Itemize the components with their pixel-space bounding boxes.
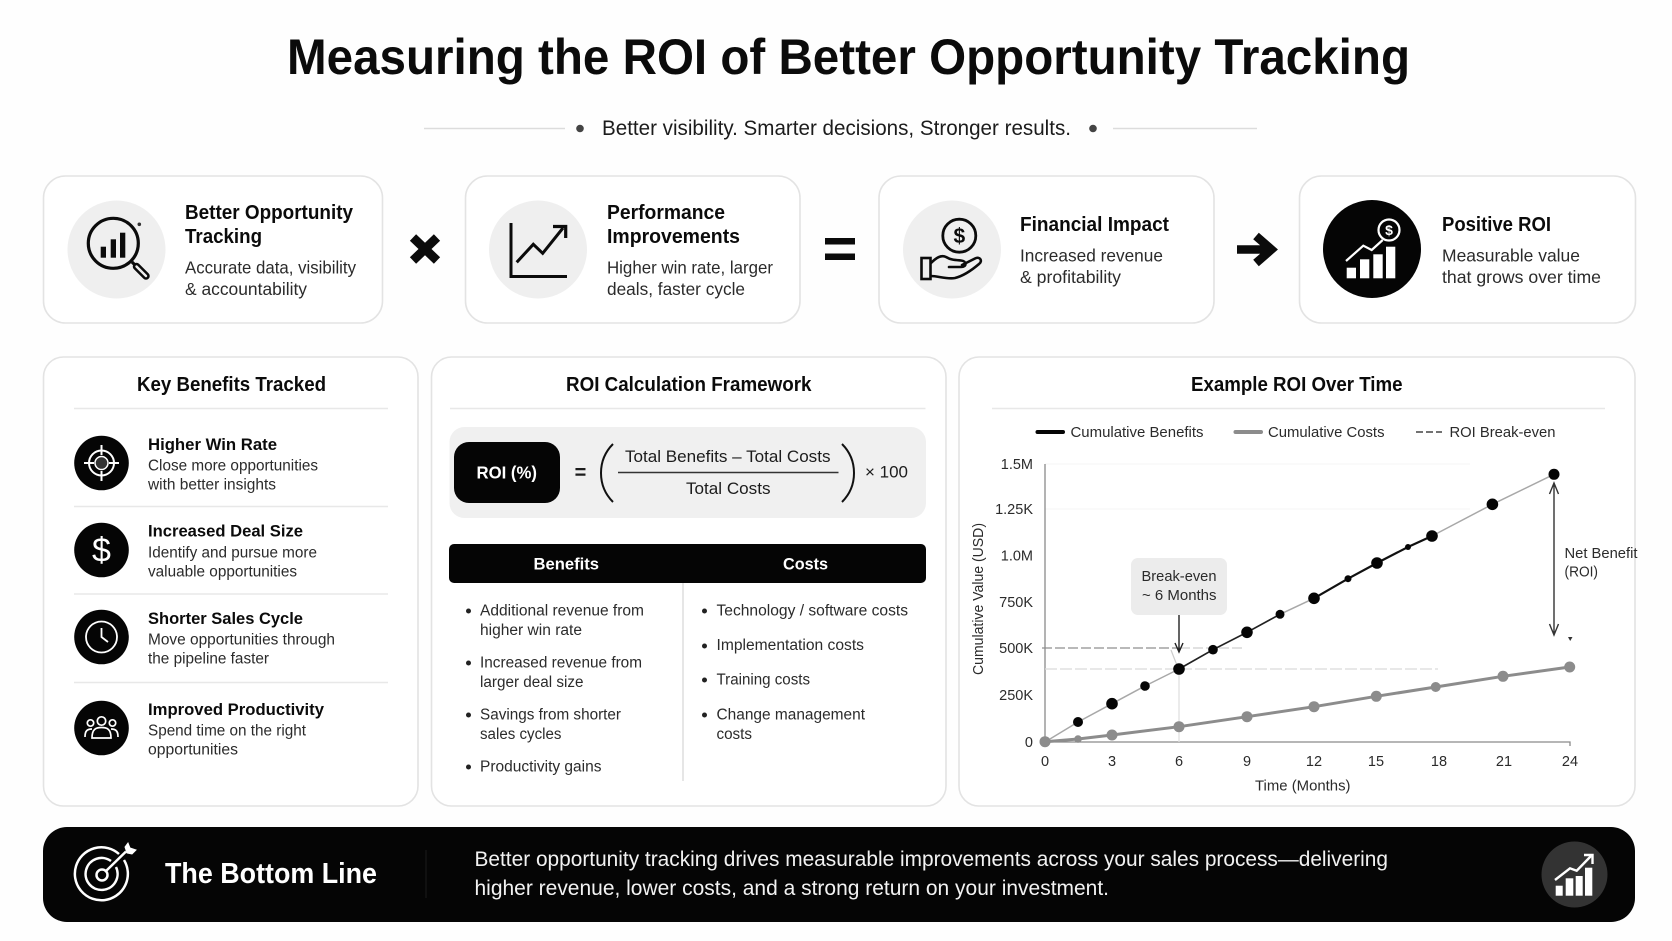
formula: Total Benefits – Total Costs <box>625 447 830 466</box>
label: net benefit <box>1564 546 1638 580</box>
x axis labels: 0 <box>1041 754 1049 770</box>
benefits list: sales cycles <box>480 726 562 743</box>
card text <box>1020 213 1169 287</box>
x axis labels: 9 <box>1243 754 1251 770</box>
x axis labels <box>1041 754 1578 770</box>
icon: dollar <box>74 523 129 577</box>
card text: deals, faster cycle <box>607 279 745 299</box>
y axis labels: 500K <box>999 641 1033 657</box>
icon: magnifier with bars <box>68 200 166 298</box>
x axis labels: 15 <box>1368 754 1384 770</box>
row: increased deal size: Increased Deal Size <box>148 522 303 540</box>
card: positive ROI <box>1300 176 1636 323</box>
callout: break-even: Break-even <box>1142 569 1216 585</box>
heading: ROI Calculation Framework <box>566 373 812 396</box>
benefits list: higher win rate <box>480 622 582 639</box>
x axis title: Time (Months) <box>1255 778 1350 794</box>
arrow: break-even pointer <box>1175 615 1183 652</box>
row: increased deal size: Identify and pursue more <box>148 544 317 562</box>
costs list: Implementation costs <box>716 637 864 654</box>
x axis labels: 6 <box>1175 754 1183 770</box>
banner text: higher revenue, lower costs, and a strong return on your investment. <box>474 876 1109 900</box>
y axis labels: 1.5M <box>1001 457 1033 473</box>
callout: break-even: ~ 6 Months <box>1142 588 1216 604</box>
banner heading: The Bottom Line <box>165 858 377 890</box>
series: cumulative costs <box>1040 662 1575 747</box>
benefits list <box>466 602 644 776</box>
arrow <box>1237 236 1272 263</box>
y axis labels: 1.25K <box>995 502 1033 518</box>
card text: Tracking <box>185 225 262 248</box>
card text: Measurable value <box>1442 246 1580 266</box>
card: performance improvements <box>466 176 800 323</box>
icon: line chart <box>489 200 587 298</box>
card text: that grows over time <box>1442 267 1601 287</box>
axes <box>1045 464 1570 746</box>
card text: Better Opportunity <box>185 201 354 224</box>
title: Measuring the ROI of Better Opportunity Tracking <box>287 29 1410 85</box>
legend: ROI Break-even <box>1450 425 1556 441</box>
table header: Costs <box>783 556 828 574</box>
icon: target with arrow <box>75 843 136 900</box>
operator: multiply <box>413 238 437 260</box>
row: improved productivity: opportunities <box>148 742 238 758</box>
row: increased deal size <box>148 522 317 580</box>
card text: Positive ROI <box>1442 213 1551 236</box>
row: higher win rate: Higher Win Rate <box>148 435 277 454</box>
card text: Financial Impact <box>1020 213 1169 236</box>
benefits list: Productivity gains <box>480 758 602 776</box>
line chart <box>971 457 1638 794</box>
card text: Increased revenue <box>1020 246 1163 266</box>
label: net benefit: (ROI) <box>1564 564 1598 580</box>
gridlines <box>1045 464 1470 509</box>
card: better opportunity tracking <box>44 176 382 323</box>
card text: & profitability <box>1020 267 1121 287</box>
label: net benefit: Net Benefit <box>1564 546 1638 562</box>
icon: target <box>74 436 129 490</box>
y axis labels: 750K <box>999 595 1033 611</box>
legend: Cumulative Benefits <box>1070 425 1204 441</box>
formula: ROI (%) <box>476 462 537 482</box>
row: shorter sales cycle: the pipeline faster <box>148 650 269 668</box>
panel: ROI calculation framework <box>432 357 946 806</box>
row: shorter sales cycle: Move opportunities through <box>148 632 335 648</box>
banner: the bottom line <box>43 827 1635 922</box>
table header <box>449 544 926 583</box>
y axis labels: 250K <box>999 688 1033 704</box>
icon: hand holding coin: $ <box>953 225 965 248</box>
y axis title: Cumulative Value (USD) <box>971 523 987 675</box>
row: shorter sales cycle: Shorter Sales Cycle <box>148 609 303 628</box>
arrow: net benefit <box>1550 483 1558 635</box>
break-even guides <box>1042 648 1438 742</box>
card: financial impact <box>879 176 1214 323</box>
costs list: costs <box>716 726 752 743</box>
subtitle: Better visibility. Smarter decisions, Stronger results. <box>602 116 1071 140</box>
legend <box>1038 425 1556 441</box>
panel: example ROI over time <box>959 357 1638 806</box>
card text <box>1442 213 1601 287</box>
icon: growth chart in black circle: $ <box>1385 222 1393 238</box>
formula <box>450 427 926 518</box>
y axis labels: 1.0M <box>1001 548 1033 564</box>
panel: key benefits tracked <box>44 357 418 806</box>
x axis labels: 18 <box>1431 754 1447 770</box>
benefits list: Increased revenue from <box>480 654 642 672</box>
x axis labels: 3 <box>1108 754 1116 770</box>
card text <box>185 201 356 299</box>
y axis labels <box>995 457 1033 751</box>
row: higher win rate: with better insights <box>147 476 276 494</box>
banner text <box>474 847 1388 900</box>
card text: Performance <box>607 201 725 224</box>
costs list: Technology / software costs <box>716 602 908 620</box>
icon: people <box>74 701 129 755</box>
icon: growth chart badge <box>1542 842 1608 908</box>
series: cumulative benefits <box>1045 469 1560 742</box>
formula: × 100 <box>865 462 908 482</box>
costs list <box>702 602 908 743</box>
row: higher win rate: Close more opportunities <box>148 458 318 474</box>
icon: growth chart in black circle <box>1323 200 1421 298</box>
card text: Higher win rate, larger <box>607 258 773 278</box>
costs list: Change management <box>716 706 866 724</box>
row: improved productivity: Improved Productivity <box>148 700 325 719</box>
y axis labels: 0 <box>1025 735 1033 751</box>
heading: Example ROI Over Time <box>1191 373 1402 396</box>
x axis labels: 21 <box>1496 754 1512 770</box>
row: higher win rate <box>147 435 318 494</box>
row: increased deal size: valuable opportunities <box>148 564 297 580</box>
costs list: Training costs <box>716 672 810 688</box>
icon: dollar: $ <box>92 532 111 570</box>
callout: break-even <box>1131 558 1227 615</box>
benefits list: larger deal size <box>480 674 584 691</box>
card text: Improvements <box>607 225 740 248</box>
formula: Total Costs <box>686 479 770 498</box>
benefits list: Savings from shorter <box>480 706 621 724</box>
subtitle <box>424 116 1257 140</box>
benefits list: Additional revenue from <box>480 602 644 620</box>
card text: Accurate data, visibility <box>185 258 356 278</box>
icon: clock <box>74 610 129 664</box>
x axis labels: 24 <box>1562 754 1578 770</box>
table header: Benefits <box>534 556 599 574</box>
icon: hand holding coin <box>903 200 1001 298</box>
formula: = <box>575 462 586 484</box>
heading: Key Benefits Tracked <box>137 373 326 396</box>
row: improved productivity: Spend time on the right <box>148 722 307 740</box>
card text: & accountability <box>185 279 307 299</box>
x axis labels: 12 <box>1306 754 1322 770</box>
banner text: Better opportunity tracking drives measurable improvements across your sales process—delivering <box>474 847 1388 871</box>
row: shorter sales cycle <box>148 609 335 668</box>
operator: equals <box>825 238 855 260</box>
legend: Cumulative Costs <box>1268 425 1384 441</box>
row: improved productivity <box>148 700 325 758</box>
card text <box>607 201 773 299</box>
